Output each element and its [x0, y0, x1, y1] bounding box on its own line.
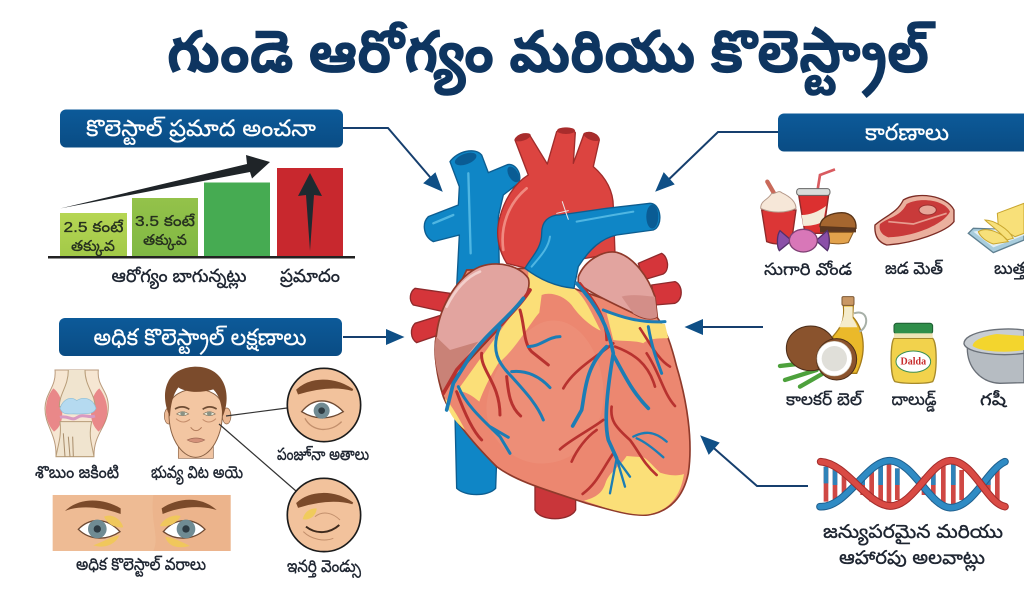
label: face: భువ్య విట అయె	[151, 463, 243, 485]
inner lighter myocardium	[486, 321, 604, 464]
pulmonary veins right	[638, 253, 681, 305]
heading banner: symptoms: అధిక కొలెస్ట్రాల్ లక్షణాలు	[94, 324, 307, 355]
bottom aorta stub	[535, 487, 576, 519]
heading banner: causes	[778, 114, 1024, 152]
bar: healthy green	[204, 182, 270, 256]
heading banner: symptoms	[59, 318, 342, 356]
label: eye closed: ఇనర్తి వెండ్సు	[287, 557, 361, 578]
panel: cholesterol risk estimate	[48, 110, 355, 289]
label: healthy: ఆరోగ్యం బాగున్నట్లు	[112, 266, 246, 289]
illustration: eyes with xanthelasma	[53, 495, 231, 551]
label: ghee: గషీ	[980, 390, 1008, 409]
bar: below 2.5: తక్కువ	[71, 238, 115, 257]
heading banner: causes: కారణాలు	[865, 119, 949, 145]
icon: ghee bowl	[964, 329, 1024, 383]
label: danger: ప్రమాదం	[280, 266, 340, 288]
panel: symptoms of high cholesterol	[35, 318, 369, 578]
aorta	[498, 129, 615, 268]
chart baseline	[48, 256, 355, 258]
arrow: genetics to heart	[702, 437, 808, 486]
arrow: symptoms to heart	[343, 330, 402, 344]
icon: coconut oil	[780, 297, 866, 387]
heading banner: risk estimate: కొలెస్టాల్ ప్రమాద అంచనా	[86, 115, 316, 145]
label: eye puffiness: పంజూ్నా అతాలు	[277, 445, 369, 464]
title: గుండె ఆరోగ్యం మరియు కొలెస్ట్రాల్	[167, 20, 936, 98]
label: genetics and diet: ఆహారపు అలవాట్లు	[839, 548, 985, 572]
connector lines	[219, 408, 296, 491]
label: dalda: దాలుడ్డ్	[892, 390, 937, 412]
label: red meat: జడ మెత్	[885, 259, 944, 278]
panel: causes	[761, 114, 1024, 412]
arrow: rising trend	[60, 155, 270, 208]
bar: danger red	[277, 168, 343, 256]
bar: below 2.5	[60, 213, 127, 257]
label: xanthelasma: అధిక కొలెస్టాల్ వరాలు	[76, 555, 206, 577]
bar: below 3.5: తక్కువ	[143, 232, 187, 251]
icon: dalda jar: Dalda	[901, 357, 926, 368]
heart illustration	[410, 127, 690, 519]
label: knee joint: శొబుం జకింటి	[35, 463, 119, 482]
bar: below 3.5	[132, 198, 198, 256]
icon: eye circle with puffy lids	[287, 368, 361, 442]
bar: below 2.5: 2.5 కంటే	[64, 219, 124, 236]
pulmonary artery	[525, 203, 660, 288]
heading banner: risk estimate	[60, 110, 343, 148]
arrow: causes to heart	[657, 132, 778, 190]
yellow fat deposits	[445, 270, 601, 430]
icon: face	[164, 367, 231, 458]
label: genetics and diet	[823, 522, 1003, 572]
superior vena cava	[424, 151, 520, 287]
arrow: fats to heart	[687, 320, 763, 334]
bar: below 3.5: 3.5 కంటే	[135, 213, 195, 230]
label: genetics and diet: జన్యుపరమైన మరియు	[823, 522, 1003, 546]
pulmonary veins left	[410, 288, 450, 343]
left auricle	[435, 264, 529, 393]
inferior vena cava	[455, 417, 497, 495]
icon: dalda jar	[891, 323, 936, 383]
icon: butter	[968, 203, 1024, 253]
right auricle	[578, 252, 657, 319]
label: sugary food: సుగారి వోండ	[764, 260, 852, 279]
icon: red meat	[875, 196, 954, 245]
coronary veins blue	[447, 283, 667, 493]
icon: knee joint	[45, 370, 108, 457]
icon: eye circle closed	[287, 478, 361, 552]
label: coconut oil: కాలకర్ బెల్	[786, 390, 864, 409]
coronary arteries red	[443, 283, 675, 494]
arrow: risk to heart	[343, 128, 441, 190]
arrow: up arrow in red bar	[298, 173, 322, 251]
icon: sugary food	[761, 169, 856, 252]
icon: DNA helix	[820, 461, 1005, 508]
main heart body	[435, 268, 690, 515]
